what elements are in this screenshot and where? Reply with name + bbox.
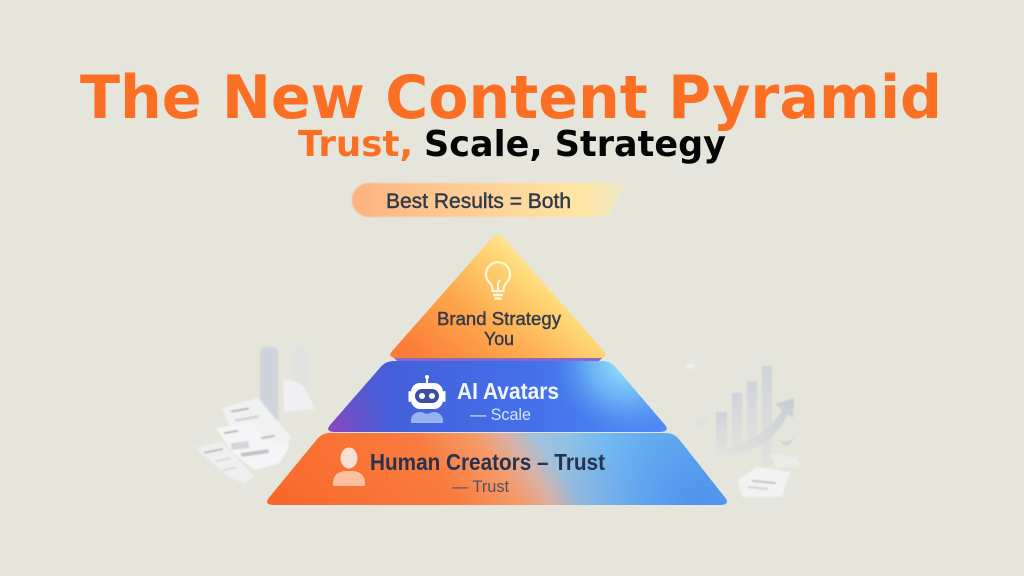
title: The New Content Pyramid <box>80 63 942 133</box>
icon: person <box>333 448 365 486</box>
tier: human creators <box>267 433 727 505</box>
tier: brand strategy <box>390 235 606 361</box>
label: brand strategy: Brand Strategy <box>437 309 561 329</box>
label: ai avatars: AI Avatars <box>457 378 559 404</box>
subtitle <box>298 124 726 165</box>
decoration: growth chart right <box>685 363 802 497</box>
sublabel: scale: — Scale <box>470 405 531 424</box>
icon: robot <box>408 375 446 423</box>
banner: best results <box>352 183 625 217</box>
decoration: documents left <box>195 346 315 483</box>
icon: light bulb <box>486 262 510 298</box>
subtitle: Trust, <box>298 124 413 165</box>
tier: ai avatars <box>328 361 667 432</box>
banner: best results: Best Results = Both <box>386 190 571 213</box>
sublabel: you: You <box>484 329 514 349</box>
subtitle: Scale, Strategy <box>424 124 726 165</box>
pyramid <box>267 235 727 505</box>
sublabel: trust: — Trust <box>452 477 509 496</box>
label: human creators: Human Creators – Trust <box>370 449 605 475</box>
